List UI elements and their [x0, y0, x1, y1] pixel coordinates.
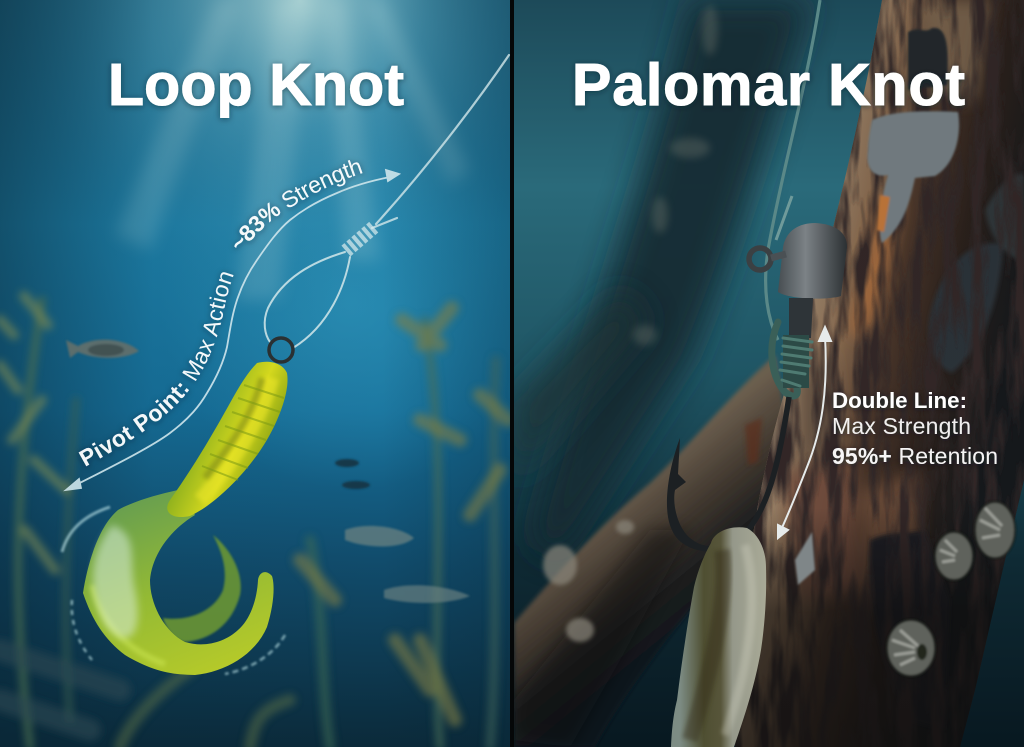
fishing line with loop knot	[265, 55, 509, 348]
soft plastic shad	[671, 527, 766, 747]
palomar knot wraps	[772, 322, 812, 396]
front tail	[83, 490, 274, 675]
peeling bark patches	[795, 28, 959, 585]
murky background	[514, 0, 1024, 747]
warm bark patches	[782, 0, 990, 610]
hook eye	[269, 338, 293, 362]
jig head	[749, 223, 847, 338]
small fish	[66, 340, 470, 603]
label: double line: Double Line:	[832, 388, 967, 413]
seaweed right	[120, 308, 508, 747]
panel: palomar knot	[514, 0, 1024, 747]
panel: loop knot	[0, 0, 510, 747]
title: palomar knot: Palomar Knot	[572, 52, 965, 118]
water splash	[62, 507, 285, 674]
divider	[510, 0, 514, 747]
title: loop knot: Loop Knot	[108, 52, 404, 118]
back tail	[163, 535, 241, 642]
fishing line	[766, 0, 820, 340]
bark grain texture	[735, 0, 1024, 747]
curly tail lure	[62, 362, 288, 675]
body	[167, 362, 288, 517]
hook	[748, 397, 789, 530]
small debris on branch	[543, 418, 762, 642]
label: double line	[832, 388, 998, 469]
label: double line: Max Strength	[832, 413, 971, 439]
label: strength: ~83% Strength	[232, 160, 364, 250]
main trunk	[735, 0, 1024, 747]
seaweed left	[0, 296, 120, 747]
curved arrow: pivot point to strength	[66, 170, 399, 490]
double arrow	[778, 327, 831, 538]
knot coils	[346, 227, 374, 251]
bottom shading	[735, 518, 1004, 747]
dark peeled bark	[867, 173, 1024, 618]
label: double line: 95%+ Retention	[832, 443, 998, 469]
fallen branch	[514, 355, 800, 747]
label: pivot point: Pivot Point: Max Action	[77, 270, 234, 468]
underwater background	[0, 0, 510, 747]
barnacles	[887, 502, 1015, 676]
